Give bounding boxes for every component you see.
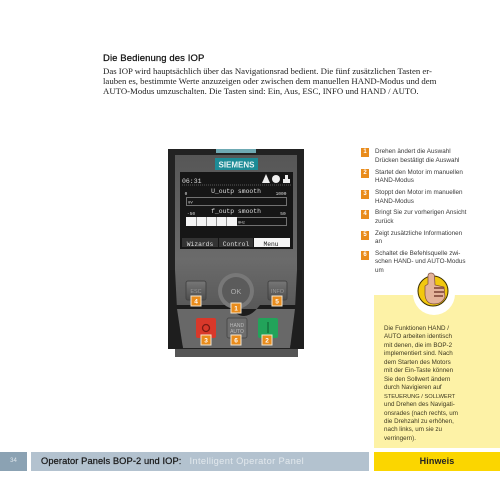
display: 0V — [188, 202, 193, 206]
hand auto key — [227, 318, 247, 338]
legend text 2: Startet den Motor im manuellen — [375, 168, 463, 176]
display: Wizards — [187, 241, 213, 248]
footer bar — [31, 452, 369, 471]
display — [180, 172, 293, 249]
navigation wheel OK: OK — [231, 287, 241, 296]
note text: nach links, um sie zu — [384, 426, 442, 433]
display: 0Hz — [238, 222, 246, 226]
icon: pointing hand — [413, 272, 455, 315]
badge 5: 5 — [363, 232, 367, 238]
footer subtitle: Intelligent Operator Panel — [190, 456, 304, 466]
display: 06:31 — [182, 178, 202, 185]
legend text 2: HAND-Modus — [375, 177, 414, 184]
display: 50 — [280, 211, 286, 217]
note text: und Drehen des Navigati- — [384, 401, 455, 408]
badge 2: 2 — [363, 170, 367, 176]
heading: Die Bedienung des IOP — [103, 53, 204, 64]
badge 1 — [361, 148, 369, 157]
INFO key — [268, 281, 287, 300]
note text — [384, 325, 458, 442]
intro text: Das IOP wird hauptsächlich über das Navigationsrad bedient. Die fünf zusätzlichen Tasten er- — [103, 66, 432, 76]
note text: mit der Ein-Taste können — [384, 367, 453, 374]
device body — [168, 149, 304, 357]
page number box — [0, 452, 27, 471]
Siemens logo — [215, 158, 258, 170]
note text: dem Starten des Motors — [384, 359, 451, 366]
legend text 1: Drehen ändert die Auswahl — [375, 148, 451, 155]
note text: die Drehzahl zu erhöhen, — [384, 418, 454, 425]
ESC key — [186, 281, 206, 300]
intro text: lauben es, bestimmte Werte anzuzeigen oder zwischen dem manuellen HAND-Modus und dem — [103, 76, 436, 86]
intro text — [103, 66, 436, 96]
legend text 6: Schaltet die Befehlsquelle zwi- — [375, 250, 460, 256]
display: Menu — [263, 241, 279, 248]
note text: implementiert sind. Nach — [384, 350, 453, 357]
note text: mit denen, die im BOP-2 — [384, 342, 452, 349]
footer title: Operator Panels BOP-2 und IOP: — [41, 456, 181, 466]
note panel background — [374, 295, 500, 448]
display: 0 — [185, 191, 188, 197]
device number badges: 2 — [265, 338, 269, 344]
display: f_outp smooth — [211, 208, 261, 215]
navigation wheel OK — [218, 273, 254, 309]
note text: durch Navigieren auf — [384, 384, 442, 391]
device number badges — [191, 296, 282, 345]
off key — [196, 318, 216, 338]
legend text 5: an — [375, 238, 382, 245]
device number badges: 5 — [275, 298, 279, 306]
legend text 1: Drücken bestätigt die Auswahl — [375, 157, 459, 164]
note text: Sie den Sollwert ändern — [384, 376, 450, 383]
legend text 3 — [375, 189, 463, 205]
Siemens logo: SIEMENS — [218, 160, 255, 170]
legend text 6: schen HAND- und AUTO-Modus — [375, 258, 466, 265]
legend text 5: Zeigt zusätzliche Informationen — [375, 230, 462, 236]
note text: STEUERUNG / SOLLWERT — [384, 394, 455, 400]
display: -50 — [187, 211, 195, 217]
legend text 5 — [375, 230, 462, 245]
badge 3: 3 — [363, 191, 367, 197]
hand auto key: HAND — [230, 323, 244, 329]
INFO key: INFO — [271, 289, 285, 295]
display: Control — [223, 241, 249, 248]
badge 6 — [361, 251, 369, 260]
note label bar: Hinweis — [420, 456, 454, 466]
legend text 2 — [375, 168, 463, 184]
device number badges: 4 — [194, 298, 198, 306]
legend text 3: HAND-Modus — [375, 198, 414, 205]
device: IOP operator panel — [168, 149, 304, 357]
status icons — [262, 174, 290, 183]
device number badges: 6 — [234, 338, 238, 344]
intro text: AUTO-Modus umzuschalten. Die Tasten sind: Ein, Aus, ESC, INFO und HAND / AUTO. — [103, 86, 419, 96]
on key — [258, 318, 278, 338]
badge 2 — [361, 169, 369, 178]
badge 3 — [361, 190, 369, 199]
page number box: 34 — [10, 458, 17, 464]
note text: verringern). — [384, 435, 416, 442]
device number badges: 3 — [204, 338, 208, 344]
display: U_outp smooth — [211, 188, 261, 195]
legend text 6 — [375, 250, 466, 274]
badge 4 — [361, 210, 369, 219]
legend text 1 — [375, 148, 459, 164]
note text: Die Funktionen HAND / — [384, 325, 449, 332]
hand auto key: AUTO — [230, 329, 244, 335]
legend text 4 — [375, 209, 466, 225]
legend text 4: zurück — [375, 218, 394, 225]
legend text 6: um — [375, 267, 384, 274]
legend text 3: Stoppt den Motor im manuellen — [375, 189, 463, 196]
badge 4: 4 — [363, 211, 367, 217]
note label bar — [374, 452, 500, 471]
badge 5 — [361, 231, 369, 240]
note text: AUTO arbeiten identisch — [384, 333, 452, 340]
ESC key: ESC — [190, 289, 202, 295]
note text: onsrades (nach rechts, um — [384, 410, 458, 417]
badge 1: 1 — [363, 149, 367, 155]
device number badges: 1 — [234, 306, 238, 312]
display: 1000 — [276, 191, 287, 197]
legend text 4: Bringt Sie zur vorherigen Ansicht — [375, 209, 466, 216]
badge 6: 6 — [363, 252, 367, 258]
